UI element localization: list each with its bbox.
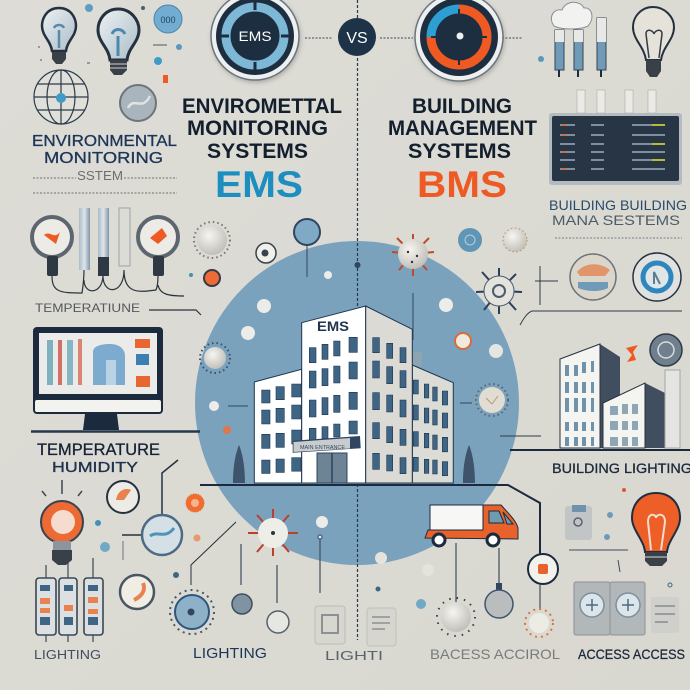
dotted rules xyxy=(33,178,177,193)
building: MAIN ENTRANCE xyxy=(300,445,346,451)
heading: temperature humidity: HUMIDITY xyxy=(52,459,138,476)
icon: virus bottom centre xyxy=(248,509,298,556)
terminal box xyxy=(651,583,679,633)
scattered specks top left xyxy=(38,4,182,83)
label: lighting two: LIGHTING xyxy=(193,645,267,662)
icon: orange ring xyxy=(528,554,558,610)
floating icons in circle xyxy=(200,219,527,434)
heading: building building xyxy=(549,197,687,228)
building xyxy=(200,306,540,555)
title: BMS: BUILDING xyxy=(412,95,512,118)
small circle badges xyxy=(209,219,527,434)
dotted rule right xyxy=(555,237,682,239)
icon: globe xyxy=(34,70,88,124)
heading: temperature humidity xyxy=(37,440,160,476)
title: BMS: BMS xyxy=(417,164,507,205)
pin lines xyxy=(228,245,472,406)
icon: bulb two xyxy=(98,9,139,75)
heading: building building: MANA SESTEMS xyxy=(552,212,680,228)
icon: blue dial xyxy=(633,253,681,301)
icon: small virus xyxy=(525,609,553,637)
icon: ring three xyxy=(120,575,154,609)
icon: virus grey xyxy=(437,543,475,636)
icon: grey pendant xyxy=(485,548,513,618)
centre dividing line xyxy=(356,0,358,640)
control panel xyxy=(549,90,682,185)
icon: small orange sun xyxy=(186,494,204,512)
windows xyxy=(262,337,448,476)
switch strips xyxy=(36,558,103,642)
double switch plate xyxy=(574,582,645,635)
icon: ring one xyxy=(107,481,139,513)
title: EMS: ENVIROMETTAL xyxy=(182,95,342,118)
line and cross right xyxy=(520,266,682,325)
heading: temperature humidity: TEMPERATURE xyxy=(37,440,160,459)
icon: landscape disc xyxy=(570,254,616,300)
right wing xyxy=(412,365,453,483)
icon: ticked ring xyxy=(170,590,214,634)
left wing xyxy=(254,369,302,483)
icon: device box xyxy=(565,488,628,572)
icon: orange dot xyxy=(189,270,220,286)
doc tile left xyxy=(315,606,345,644)
icon: bulb right xyxy=(633,7,674,77)
central blue circle xyxy=(195,241,519,565)
tower label: EMS xyxy=(317,318,349,334)
title: EMS: EMS xyxy=(215,164,303,205)
virus right lower xyxy=(476,384,508,416)
icon: VS badge: VS xyxy=(346,30,368,47)
connector to ring xyxy=(191,522,236,585)
virus left xyxy=(200,343,230,373)
label: lighting one: LIGHTING xyxy=(34,647,101,662)
virus right xyxy=(476,268,522,314)
icon: cloud and tubes xyxy=(538,2,606,77)
icon: badges on circle edge xyxy=(375,552,434,609)
truck xyxy=(425,505,518,546)
label: lighti: LIGHTI xyxy=(325,648,383,663)
connector: EMS to VS xyxy=(305,37,522,39)
icon: virus left top xyxy=(194,222,230,258)
trees xyxy=(233,445,475,483)
icon: EMS dial: EMS xyxy=(238,29,272,44)
heading: building building: BUILDING BUILDING xyxy=(549,197,687,213)
icon: ring two with connector xyxy=(122,460,182,555)
title: BMS: MANAGEMENT xyxy=(388,117,537,140)
heading: building lighting: BUILDING LIGHTING xyxy=(552,460,690,476)
icon: EMS dial xyxy=(211,0,299,80)
windows xyxy=(565,361,594,446)
title: BMS xyxy=(388,95,537,205)
icon: BMS dial xyxy=(415,0,503,81)
icon: orange bulb left xyxy=(41,480,83,565)
icon: VS badge xyxy=(338,18,376,56)
virus top xyxy=(392,234,434,276)
specks left xyxy=(95,520,200,578)
icon: orange bulb right xyxy=(632,493,680,566)
heading: environmental monitoring: MONITORING xyxy=(44,150,163,167)
icon: grey disc xyxy=(120,85,156,121)
heading: environmental monitoring: SSTEM xyxy=(77,168,123,183)
title: EMS: MONITORING xyxy=(187,117,328,140)
title: EMS xyxy=(182,95,342,205)
title: EMS: SYSTEMS xyxy=(207,140,308,163)
doc tile right xyxy=(367,608,396,646)
small rooftop unit xyxy=(413,352,422,366)
icon: bulb one xyxy=(42,8,76,64)
entrance canopy xyxy=(293,436,361,453)
label: temperatiune xyxy=(35,301,201,315)
label: bacess accirol: BACESS ACCIROL xyxy=(430,646,560,662)
heading: environmental monitoring: ENVIRONMENTAL xyxy=(32,133,177,150)
monitor xyxy=(31,327,200,432)
title: BMS: SYSTEMS xyxy=(408,140,511,163)
main tower front xyxy=(302,306,366,483)
icon: blue badge: 000 xyxy=(160,15,176,25)
door xyxy=(317,453,347,483)
small factory group xyxy=(500,334,690,450)
heading: environmental monitoring xyxy=(32,133,177,183)
icon: blue badge xyxy=(154,5,182,33)
sensors: gauges and tubes xyxy=(32,208,184,296)
main tower side xyxy=(366,306,412,483)
icon: pendant sensors xyxy=(232,516,328,633)
ground line xyxy=(200,485,540,555)
label: temperatiune: TEMPERATIUNE xyxy=(35,301,140,315)
